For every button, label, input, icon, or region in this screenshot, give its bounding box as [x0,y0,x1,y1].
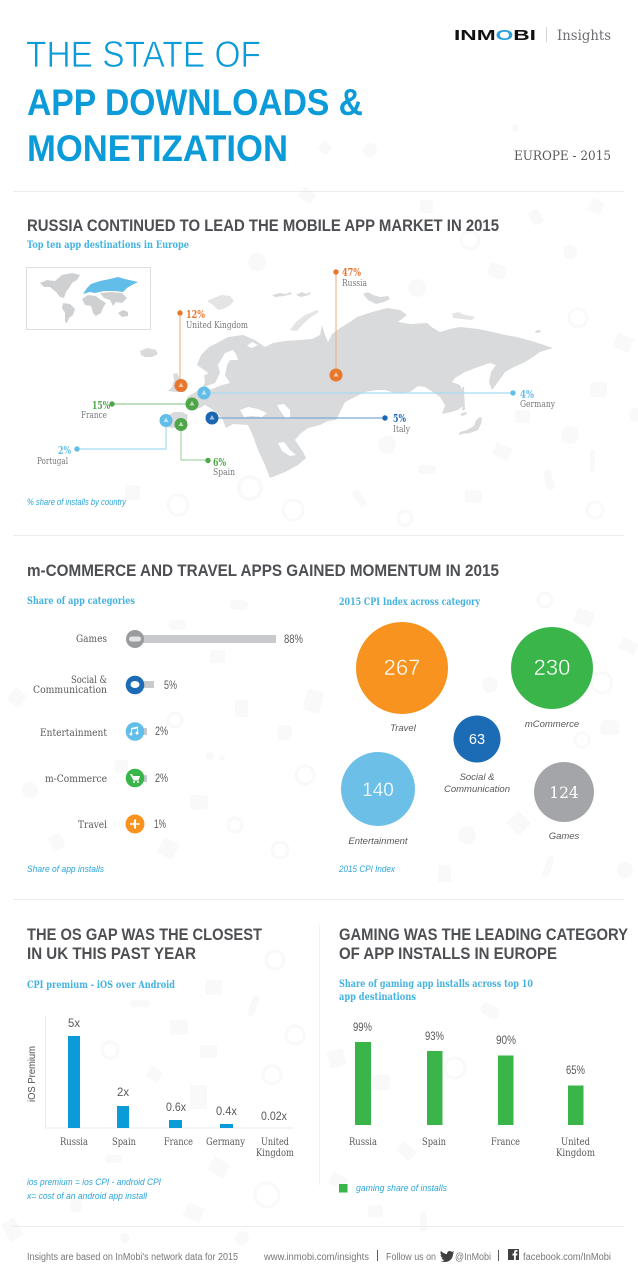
row: m-Commerce [45,769,168,787]
marker: France: 15% [92,399,110,412]
bubble: Social: Social & [460,772,494,783]
bar chart: gaming share: France [491,1137,520,1148]
footer: source note: Insights are based on InMobi's network data for 2015 [27,1252,238,1263]
marker: United Kingdom: 12% [186,308,205,321]
marker: Germany: 4% [520,388,534,401]
title [26,34,363,169]
bar chart: iOS premium: 0.6x [166,1102,186,1114]
marker: Spain: 6% [213,456,226,469]
panel: inset world map [26,268,150,330]
bubble: Games: 124 [549,784,579,802]
marker: Russia: Russia [342,279,368,289]
section heading: OS gap [27,926,262,963]
logo: InMobi Insights: INM O BI [454,27,536,44]
subheading: gaming share: Share of gaming app installs across top 10 [339,978,533,990]
bubble chart: CPI index [341,622,594,847]
subheading: gaming share [339,978,533,1003]
map: Eurasia [140,292,553,478]
row: m-Commerce: 2% [155,773,168,785]
marker: France: France [81,411,107,421]
bubble: Social: 63 [469,732,485,748]
marker: Germany [198,386,556,410]
row: Travel: 1% [154,819,166,831]
row: Social: Social & [71,675,107,686]
bubble: mCommerce: mCommerce [525,719,579,730]
marker: Italy: Italy [393,425,411,435]
marker: United Kingdom: United Kingdom [186,321,248,331]
footer: links: facebook.com/InMobi [523,1252,611,1263]
row: Entertainment: Entertainment [40,728,107,739]
row: Social: 5% [164,680,177,692]
subheading: app categories: Share of app categories [27,595,135,607]
bar chart: iOS premium: Germany [206,1137,245,1148]
marker: France [81,398,198,421]
row: Travel: Travel [78,820,107,831]
bubble: mCommerce: 230 [534,655,570,680]
row: m-Commerce: m-Commerce [45,774,107,785]
footer: links: www.inmobi.com/insights [263,1252,369,1263]
bar chart: app categories [33,630,303,834]
bubble: Entertainment [341,752,415,847]
marker: Portugal: 2% [58,444,71,457]
bubble: Social: Communication [444,784,510,795]
row: Travel [78,814,166,834]
bubble: Entertainment: Entertainment [348,836,408,847]
title: MONETIZATION [27,128,288,169]
notes: iOS premium [26,1177,161,1202]
row: Entertainment [40,722,168,741]
row: Games [76,630,303,648]
bar chart: gaming share: 99% [353,1022,372,1034]
map connectors [77,272,513,460]
bar chart: gaming share: United [561,1137,591,1148]
note: CPI index: 2015 CPI Index [338,864,395,874]
bar chart: gaming share: Kingdom [556,1148,595,1159]
bubble: Travel [356,622,448,734]
bar chart: gaming share: 93% [425,1031,444,1043]
row: Social: Communication [33,685,108,696]
section heading: gaming: OF APP INSTALLS IN EUROPE [339,945,557,963]
bar chart: gaming share [349,1022,595,1159]
marker: United Kingdom [174,308,248,392]
section heading: OS gap: THE OS GAP WAS THE CLOSEST [27,926,262,944]
notes: iOS premium: ios premium = ios CPI - android CPI [27,1177,161,1188]
bar chart: gaming share: Spain [422,1137,446,1148]
section heading: Russia: RUSSIA CONTINUED TO LEAD THE MOBILE APP MARKET IN 2015 [27,217,499,235]
subheading: gaming share: app destinations [339,991,416,1003]
bar chart: iOS premium: France [164,1137,193,1148]
map note: % share of installs by country [27,497,126,507]
subheading: CPI premium: CPI premium - iOS over Android [27,979,176,991]
icon: twitter [440,1251,454,1262]
logo: InMobi Insights: Insights [557,28,611,44]
footer: links: @InMobi [455,1252,491,1263]
bubble: Games [534,762,594,842]
bubble: Games: Games [549,831,580,842]
marker: Russia [330,266,368,382]
note: app installs: Share of app installs [27,864,104,874]
bar chart: gaming share: Russia [349,1137,377,1148]
bubble: Entertainment: 140 [362,780,394,801]
logo: InMobi Insights [454,27,611,44]
bar chart: iOS premium: 0.02x [261,1111,287,1123]
bar chart: iOS premium: Russia [60,1137,88,1148]
row: Games: 88% [284,634,303,646]
bar chart: iOS premium: Spain [112,1137,136,1148]
bubble: Travel: 267 [384,655,420,680]
marker: Italy: 5% [393,412,406,425]
marker: Spain [174,418,235,478]
bar chart: iOS premium: Kingdom [256,1148,294,1159]
bar chart: iOS premium: United [261,1137,289,1148]
axis label: iOS Premium [26,1046,38,1102]
bar chart: iOS premium: 5x [68,1018,80,1030]
bar chart: iOS premium: 2x [117,1087,129,1099]
marker: Spain: Spain [213,468,235,478]
title: THE STATE OF [26,34,261,75]
region label: EUROPE - 2015 [514,149,611,164]
bubble: mCommerce [511,627,593,730]
bubble: Social [444,716,510,795]
bar chart: iOS premium: 0.4x [216,1106,237,1118]
legend: gaming share: gaming share of installs [356,1183,447,1194]
section heading: gaming [339,926,628,963]
marker: Portugal [37,414,172,467]
marker: Italy [206,412,411,435]
row: Social [33,675,177,696]
marker: Germany: Germany [520,400,556,410]
bubble: Travel: Travel [390,723,417,734]
bar chart: gaming share: 65% [566,1065,585,1077]
bar chart: iOS premium [26,1016,294,1159]
map: seas [204,342,296,456]
marker: Russia: 47% [342,266,361,279]
marker: Portugal: Portugal [37,457,68,467]
icon: facebook [508,1249,519,1260]
subheading: top ten: Top ten app destinations in Europe [27,239,189,251]
section heading: m-commerce: m-COMMERCE AND TRAVEL APPS GAINED MOMENTUM IN 2015 [27,562,499,580]
title: APP DOWNLOADS & [27,82,363,123]
subheading: CPI index: 2015 CPI Index across category [339,596,481,608]
notes: iOS premium: x= cost of an android app install [26,1191,148,1202]
footer: links: Follow us on [386,1252,436,1263]
row: Games: Games [76,634,107,645]
row: Entertainment: 2% [155,726,168,738]
footer: links [263,1249,611,1263]
section heading: OS gap: IN UK THIS PAST YEAR [27,945,196,963]
bar chart: gaming share: 90% [496,1035,516,1047]
